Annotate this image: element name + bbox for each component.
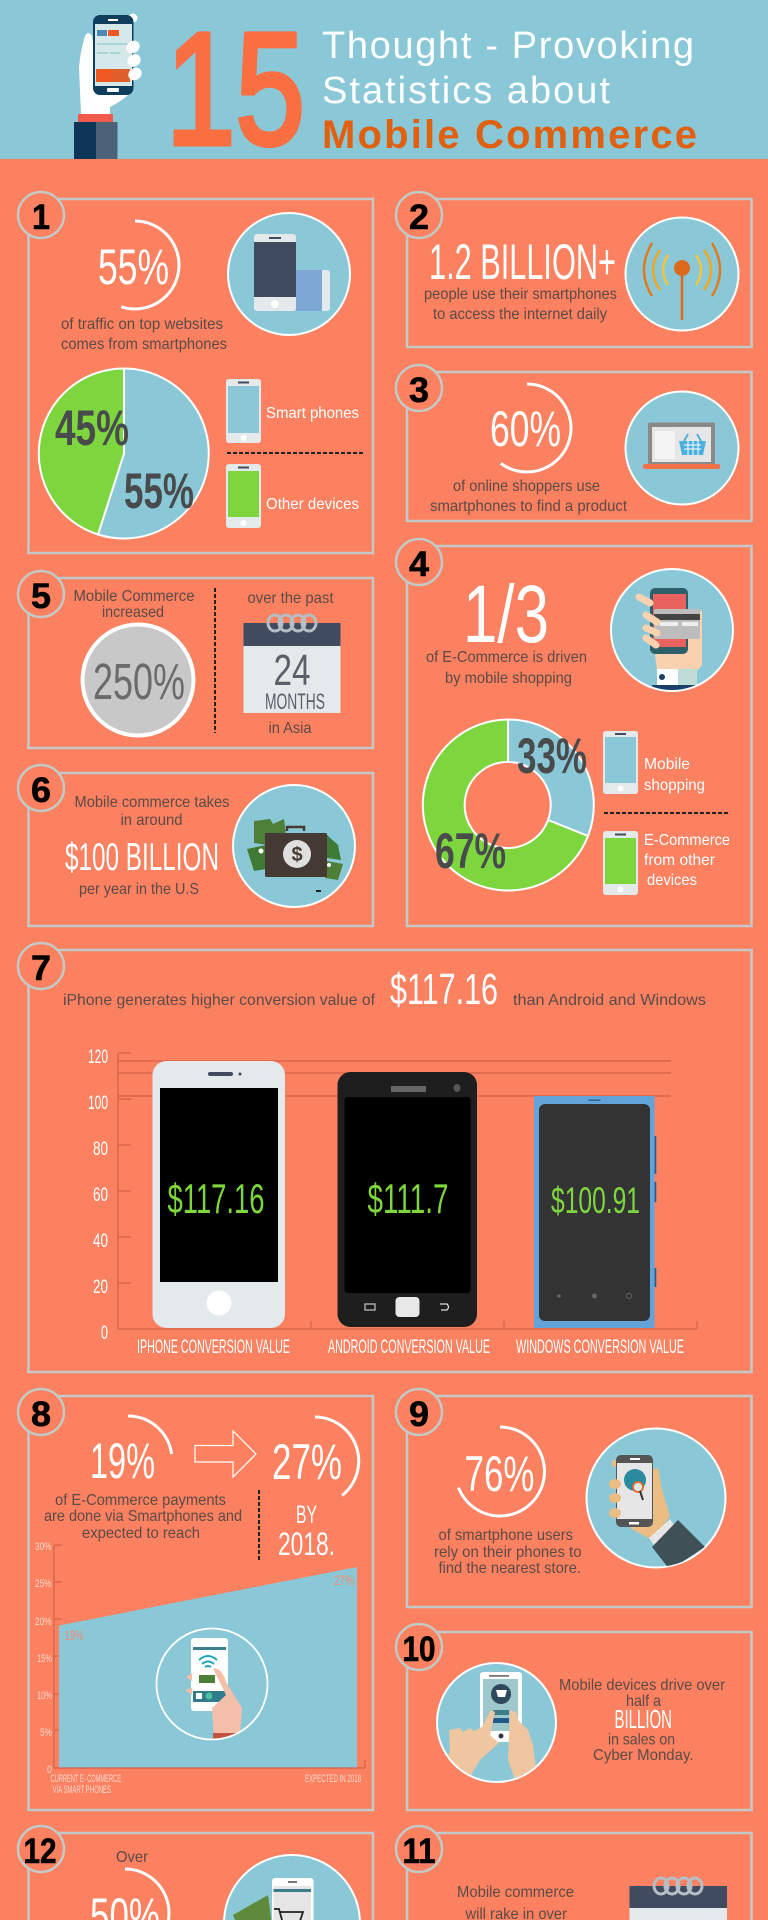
caption (61, 316, 227, 353)
headline sentence: iPhone generates higher conversion value of (63, 992, 376, 1009)
caption (457, 1884, 574, 1920)
icon: hand holding phone with wifi (156, 1628, 268, 1740)
badge 7 (18, 943, 64, 989)
title text: Thought - Provoking (322, 25, 694, 67)
caption: Mobile devices drive over (559, 1677, 726, 1694)
badge 8: 8 (31, 1395, 51, 1434)
badge 1 (18, 192, 64, 238)
x-axis labels (137, 1337, 684, 1358)
caption (430, 478, 628, 515)
bar chart axes: 20 (93, 1277, 108, 1298)
caption: are done via Smartphones and (44, 1508, 242, 1525)
area chart: 20% (35, 1616, 52, 1628)
caption: of online shoppers use (453, 478, 600, 495)
stat circle 250 percent: 250% (93, 653, 185, 710)
panel 4: one third (396, 539, 752, 926)
title text: Statistics about (322, 70, 610, 112)
caption (44, 1492, 242, 1542)
panel 1: traffic (18, 192, 373, 553)
pie chart: 45% (55, 400, 129, 456)
title text (322, 25, 697, 157)
caption (424, 286, 617, 323)
stat 50 percent with arc (81, 1869, 169, 1920)
stat 60 percent with arc (483, 384, 571, 472)
panel 11: mobile commerce forecast (396, 1826, 752, 1920)
caption left: Mobile Commerce (74, 588, 195, 605)
bar chart axes: 120 (88, 1047, 108, 1068)
legend: mobile shopping: Mobile (644, 756, 690, 773)
badge 5 (18, 571, 64, 617)
badge 4 (396, 539, 442, 585)
x-axis labels: IPHONE CONVERSION VALUE (137, 1337, 290, 1358)
badge 7: 7 (31, 949, 51, 988)
area chart: 15% (37, 1653, 52, 1665)
legend: mobile shopping: shopping (644, 777, 705, 794)
panel 2: 1.2 billion (396, 192, 752, 347)
icon: laptop with basket (626, 392, 738, 504)
icon: calendar 24 months: MONTHS (265, 689, 325, 714)
panel 6: 100 billion (18, 765, 373, 926)
icon: calendar 24 months: 24 (274, 646, 310, 695)
icon: phone with cart and money (224, 1855, 360, 1920)
panel 12: over 50 percent (18, 1826, 373, 1920)
bar chart axes (88, 1047, 697, 1344)
caption: smartphones to find a product (430, 498, 628, 515)
pie chart: 55% (124, 463, 194, 519)
panel 5: 250 percent (18, 571, 373, 748)
donut chart (423, 719, 594, 890)
caption: of smartphone users (438, 1527, 573, 1544)
caption: rely on their phones to (434, 1544, 582, 1561)
badge 6 (18, 765, 64, 811)
caption: in sales on (608, 1732, 675, 1748)
by 2018 text (278, 1501, 335, 1562)
icon: antenna signal (626, 218, 738, 330)
caption: Cyber Monday. (593, 1747, 694, 1764)
caption: by mobile shopping (445, 670, 572, 687)
arrow (195, 1431, 256, 1477)
caption right top: over the past (248, 590, 334, 607)
icon: briefcase of money: $ (291, 844, 303, 866)
badge 11: 11 (402, 1832, 436, 1871)
icon: briefcase of money (233, 785, 355, 907)
area chart: 5% (40, 1727, 52, 1739)
title numeral 15: 15 (166, 0, 305, 178)
bar: iPhone phone (152, 1061, 285, 1328)
legend: e-commerce from other devices (603, 831, 730, 895)
stat 55 percent with arc: 55% (98, 239, 169, 295)
caption top: in around (120, 812, 182, 829)
stat 55 percent with arc (91, 221, 179, 309)
pie chart (39, 368, 209, 538)
area chart: CURRENT E- COMMERCE (50, 1773, 121, 1785)
stat 100 billion: $100 BILLION (65, 836, 219, 879)
badge 9 (396, 1389, 442, 1435)
legend: e-commerce from other devices: from other (644, 852, 716, 869)
badge 1: 1 (32, 198, 50, 237)
stat one third: 1/3 (463, 569, 549, 660)
caption: of E-Commerce payments (55, 1492, 226, 1509)
stat 27 percent: 27% (272, 1434, 342, 1490)
bar: Windows phone: $100.91 (551, 1180, 640, 1221)
stat 27 percent (272, 1417, 359, 1496)
legend: e-commerce from other devices: devices (647, 872, 697, 889)
bar: iPhone phone: $117.16 (168, 1175, 264, 1222)
bar: Windows phone (534, 1096, 656, 1328)
legend: e-commerce from other devices: E-Commerce (644, 832, 730, 849)
badge 9: 9 (409, 1395, 429, 1434)
donut chart: 33% (517, 728, 587, 784)
icon: hands holding phone with cart (437, 1663, 556, 1785)
caption: half a (626, 1693, 661, 1710)
bar chart axes: 60 (93, 1185, 108, 1206)
caption (434, 1527, 582, 1577)
headline sentence: $117.16 (390, 965, 498, 1014)
headline sentence (63, 965, 706, 1014)
icon: hand with phone and globe (586, 1428, 726, 1570)
legend: mobile shopping (603, 731, 705, 794)
icon: phone and tablet (228, 213, 350, 335)
stat 60 percent with arc: 60% (490, 401, 561, 457)
badge 2 (396, 192, 442, 238)
caption right bottom: in Asia (268, 720, 312, 737)
panel 10: cyber monday (396, 1624, 752, 1810)
badge 3 (396, 365, 442, 411)
area chart: 25% (35, 1578, 52, 1590)
x-axis labels: ANDROID CONVERSION VALUE (328, 1337, 490, 1358)
badge 11 (396, 1826, 442, 1872)
title text: Mobile Commerce (322, 113, 697, 157)
caption: Over (116, 1849, 149, 1866)
area chart: VIA SMART PHONES (52, 1784, 111, 1796)
area chart: 19% (65, 1627, 83, 1643)
stat 76 percent with arc (456, 1427, 544, 1516)
by 2018 text: 2018. (278, 1526, 335, 1562)
caption: comes from smartphones (61, 336, 227, 353)
caption top (74, 794, 230, 829)
legend: smart phones (226, 379, 359, 443)
stat 1.2 billion: 1.2 BILLION+ (429, 234, 616, 290)
caption: people use their smartphones (424, 286, 617, 303)
stat 19 percent: 19% (90, 1433, 155, 1489)
legend: other devices: Other devices (266, 496, 359, 513)
donut chart: 67% (435, 823, 506, 879)
badge 2: 2 (409, 198, 429, 237)
legend: other devices (226, 464, 359, 528)
caption: find the nearest store. (438, 1560, 581, 1577)
stat 19 percent (84, 1416, 172, 1504)
area chart: 27% (334, 1572, 354, 1588)
bar: Android phone: $111.7 (368, 1175, 448, 1222)
area chart: 0 (47, 1764, 52, 1776)
icon: calendar (630, 1878, 727, 1920)
stat circle 250 percent (82, 624, 194, 736)
area chart: EXPECTED IN 2018 (305, 1773, 361, 1785)
header band (0, 0, 768, 178)
stat 76 percent with arc: 76% (464, 1446, 534, 1502)
caption: expected to reach (82, 1525, 200, 1542)
bar chart axes: 40 (93, 1231, 108, 1252)
by 2018 text: BY (296, 1501, 317, 1529)
caption left: increased (102, 604, 164, 621)
bar chart axes: 100 (88, 1093, 108, 1114)
area chart (35, 1541, 365, 1796)
badge 12: 12 (24, 1832, 56, 1871)
badge 5: 5 (31, 577, 51, 616)
caption left (74, 588, 195, 621)
badge 8 (18, 1389, 64, 1435)
area chart: 30% (35, 1541, 52, 1553)
caption (559, 1677, 726, 1764)
caption: Mobile commerce (457, 1884, 574, 1901)
badge 6: 6 (31, 771, 51, 810)
headline sentence: than Android and Windows (513, 992, 706, 1009)
badge 4: 4 (409, 545, 430, 584)
panel 9: nearest store (396, 1389, 752, 1607)
caption top: Mobile commerce takes (74, 794, 230, 811)
badge 10: 10 (402, 1630, 436, 1669)
icon: calendar 24 months (244, 615, 340, 714)
caption: to access the internet daily (433, 306, 607, 323)
caption (426, 649, 587, 687)
bar chart axes: 0 (101, 1323, 108, 1344)
panel 7: conversion value (18, 943, 752, 1372)
caption: BILLION (614, 1704, 672, 1734)
icon: hand with phone and card (611, 569, 733, 693)
panel 3: online shoppers (396, 365, 752, 521)
caption bottom: per year in the U.S (79, 881, 199, 898)
caption: of traffic on top websites (61, 316, 223, 333)
bar chart axes: 80 (93, 1139, 108, 1160)
caption: of E-Commerce is driven (426, 649, 587, 666)
icon: hand holding phone (74, 14, 144, 159)
bar: Android phone (338, 1072, 477, 1327)
legend: smart phones: Smart phones (266, 405, 359, 422)
badge 3: 3 (409, 371, 429, 410)
panel 8: payments (18, 1389, 373, 1810)
area chart: 10% (37, 1690, 52, 1702)
